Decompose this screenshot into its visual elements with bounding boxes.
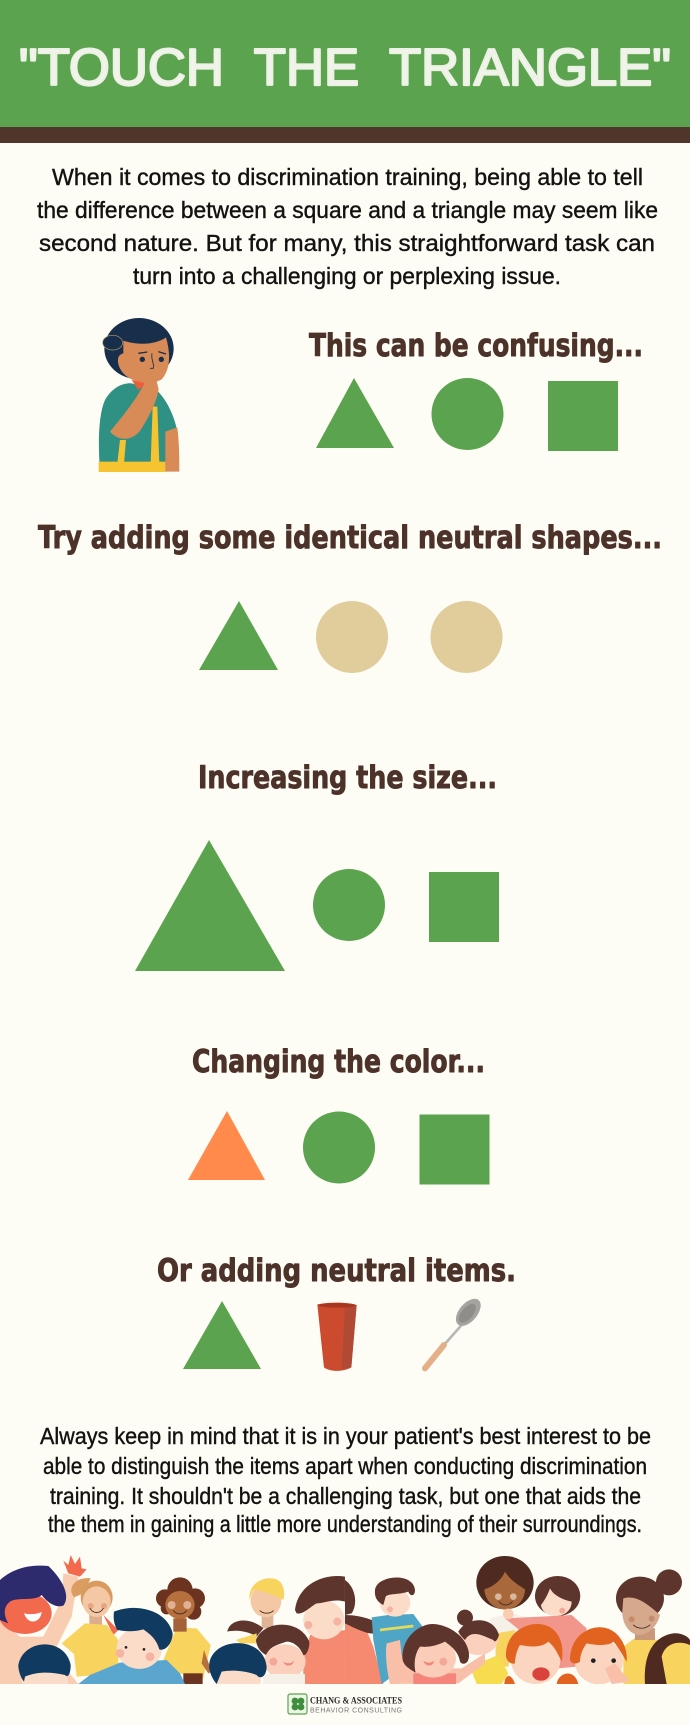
logo icon xyxy=(288,1694,307,1714)
shapes row: confusing xyxy=(316,378,618,451)
header banner xyxy=(0,0,690,143)
shapes row: colour xyxy=(188,1111,490,1184)
closing paragraph xyxy=(40,1423,651,1537)
triangle xyxy=(183,1301,261,1369)
intro paragraph: When it comes to discrimination training, being able to tell xyxy=(52,164,643,190)
child with hair bun xyxy=(457,1610,508,1684)
icon: spoon xyxy=(425,1294,485,1368)
tall child with dark skin xyxy=(476,1556,534,1667)
triangle xyxy=(316,378,394,448)
heading: increasing size: Increasing the size... xyxy=(198,760,497,796)
logo xyxy=(288,1694,402,1714)
square xyxy=(429,872,499,942)
blond boy xyxy=(249,1578,284,1628)
tan circle two xyxy=(430,601,502,673)
red haired child holding nose xyxy=(570,1627,630,1684)
child with pigtail xyxy=(227,1621,309,1684)
small navy child xyxy=(209,1643,267,1684)
curly haired child xyxy=(156,1577,212,1684)
intro paragraph: turn into a challenging or perplexing issue. xyxy=(133,263,561,289)
right woman with backpack xyxy=(616,1569,690,1684)
closing paragraph: Always keep in mind that it is in your patient's best interest to be xyxy=(40,1423,651,1449)
icon: thinking child xyxy=(99,318,179,472)
circle xyxy=(313,869,385,941)
square xyxy=(420,1114,490,1184)
tan circle one xyxy=(316,601,388,673)
icon: red cup xyxy=(317,1303,357,1371)
small navy haired child xyxy=(18,1644,71,1684)
child in pink shirt xyxy=(503,1576,587,1668)
closing paragraph: training. It shouldn't be a challenging task, but one that aids the xyxy=(50,1483,641,1509)
boy in teal shirt xyxy=(372,1577,425,1684)
boy in blue shirt xyxy=(78,1608,185,1684)
shapes row: size xyxy=(135,840,499,971)
coral dress continuation xyxy=(345,1623,383,1684)
logo name: CHANG & ASSOCIATES xyxy=(310,1696,402,1706)
triangle xyxy=(199,601,278,670)
title: "TOUCH THE TRIANGLE" xyxy=(19,39,671,97)
children illustration: right half xyxy=(345,1556,690,1684)
intro paragraph: the difference between a square and a triangle may seem like xyxy=(37,197,658,223)
child in yellow shirt with ponytail xyxy=(62,1578,118,1677)
circle xyxy=(303,1112,375,1184)
waving child in pink xyxy=(386,1624,485,1684)
intro paragraph: second nature. But for many, this straightforward task can xyxy=(39,230,655,256)
large triangle xyxy=(135,840,285,971)
orange triangle xyxy=(188,1111,265,1180)
logo tagline: BEHAVIOR CONSULTING xyxy=(310,1708,402,1714)
waving child xyxy=(0,1555,87,1684)
intro paragraph xyxy=(37,164,658,289)
shapes row: neutral shapes xyxy=(199,601,502,673)
square xyxy=(548,381,618,451)
heading: changing colour: Changing the color... xyxy=(192,1044,485,1080)
red haired laughing child xyxy=(504,1624,578,1684)
circle xyxy=(432,378,504,450)
heading: neutral items: Or adding neutral items. xyxy=(157,1253,516,1289)
children illustration: left half xyxy=(0,1555,345,1695)
child with brown hair and coral dress xyxy=(295,1576,345,1684)
items row xyxy=(183,1294,485,1371)
